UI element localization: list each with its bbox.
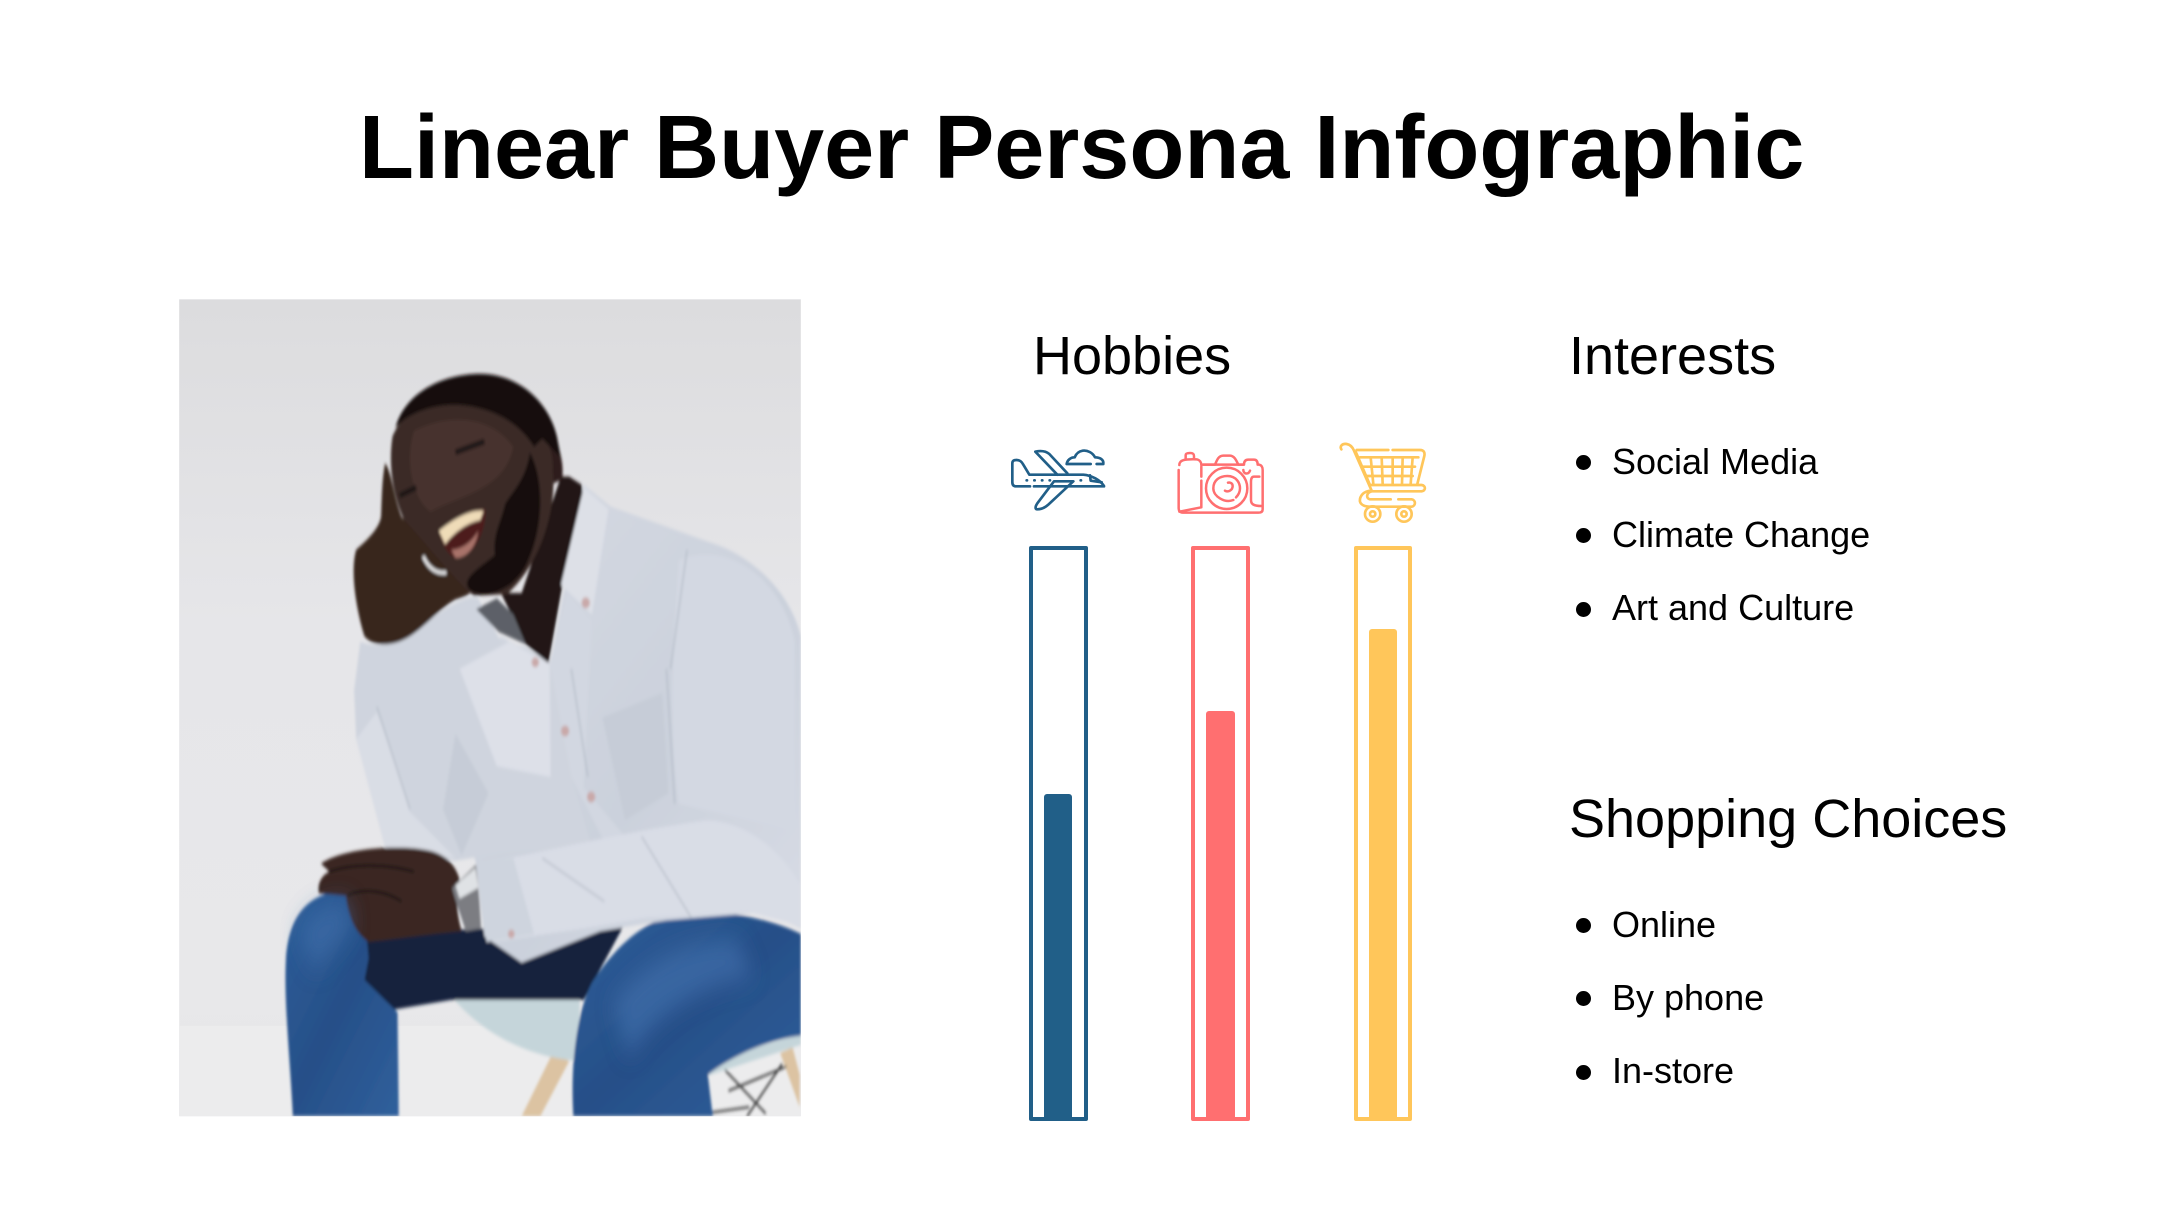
hand at head: [354, 463, 470, 644]
list: shopping choices: [1576, 904, 1764, 1091]
list: shopping choices: By phone: [1612, 977, 1764, 1018]
wrinkles: [377, 550, 691, 918]
list: interests: [1576, 440, 1870, 628]
left leg: [285, 891, 399, 1116]
heading: Interests: Interests: [1569, 326, 1776, 386]
hand on knee: [319, 848, 462, 942]
sleeve upper highlight: [672, 554, 795, 831]
heading: Shopping Choices: Shopping Choices: [1569, 789, 2007, 849]
collar and neck: [501, 477, 584, 663]
list: shopping choices: Online: [1612, 904, 1716, 945]
list: shopping choices: In-store: [1612, 1050, 1734, 1091]
list: interests: Climate Change: [1612, 514, 1870, 554]
eyes and brow: [400, 442, 484, 496]
chair seat: [451, 993, 580, 1061]
photo: smiling man seated on a chair: [179, 299, 801, 1116]
mouth: [444, 510, 486, 556]
buttons: [582, 597, 590, 608]
watch: [452, 865, 481, 931]
heading: Hobbies: Hobbies: [1033, 326, 1231, 386]
phone edge: [423, 556, 446, 573]
shirt torso: [435, 485, 801, 963]
list: interests: Art and Culture: [1612, 586, 1854, 628]
list: interests: Social Media: [1612, 440, 1818, 482]
right thigh: [573, 912, 801, 1116]
pocket: [602, 693, 669, 820]
raised sleeve: [354, 594, 544, 864]
jeans dark inner: [352, 923, 625, 1010]
beard: [467, 452, 540, 595]
bar: travel hobby level: [1029, 546, 1088, 1121]
collar and placket: [561, 488, 609, 615]
bar: photography hobby level: [1191, 546, 1250, 1121]
jeans highlights: [298, 901, 753, 1058]
title: Linear Buyer Persona Infographic: [359, 98, 1804, 198]
ear: [534, 435, 563, 490]
bar: shopping hobby level: [1354, 546, 1412, 1121]
forearm sleeve: [514, 822, 776, 935]
chair legs: [522, 1053, 569, 1116]
head skin: [391, 392, 553, 596]
hair: [395, 374, 561, 458]
